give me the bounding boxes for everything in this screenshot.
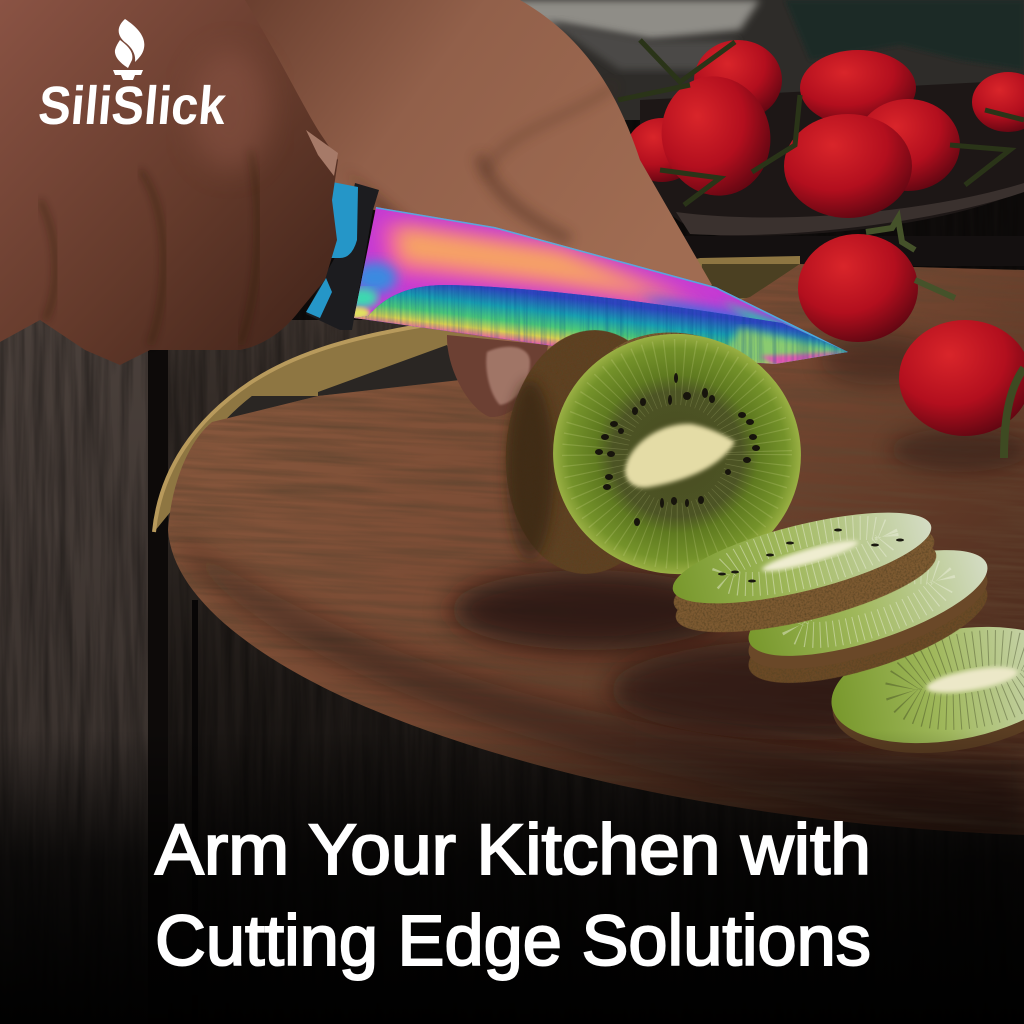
kiwi seeds xyxy=(595,373,760,526)
headline: Cutting Edge Solutions xyxy=(155,902,871,981)
fingernail xyxy=(306,130,338,176)
kiwi flesh xyxy=(538,318,816,590)
logo wordmark: SiliSlick xyxy=(36,76,229,136)
tomato: plate cluster xyxy=(618,40,1024,218)
gold tray rim xyxy=(154,256,800,532)
slice 3 xyxy=(832,626,1024,753)
kiwi half xyxy=(498,318,816,590)
bottom dark fade xyxy=(0,730,1024,1024)
right hand xyxy=(200,0,712,350)
slice seeds xyxy=(718,528,904,582)
plate xyxy=(640,80,1024,236)
kiwi slices xyxy=(672,512,1024,753)
round cutting board xyxy=(168,264,1024,835)
blade bevel xyxy=(354,285,848,364)
headline xyxy=(155,811,871,981)
logo flame icon xyxy=(113,19,144,80)
knife blade xyxy=(354,207,848,364)
slice 1 xyxy=(672,512,936,632)
loose tomatoes xyxy=(798,218,1024,458)
knife xyxy=(306,182,848,364)
left hand xyxy=(0,0,338,365)
thumbnail xyxy=(486,347,530,405)
headline: Arm Your Kitchen with xyxy=(155,811,871,890)
slice 2 xyxy=(748,550,988,683)
knife handle xyxy=(306,183,379,330)
thumb xyxy=(447,335,548,417)
kiwi core xyxy=(625,424,735,488)
board shadows xyxy=(450,570,730,650)
plate of tomatoes xyxy=(440,0,1024,266)
logo xyxy=(36,19,229,136)
